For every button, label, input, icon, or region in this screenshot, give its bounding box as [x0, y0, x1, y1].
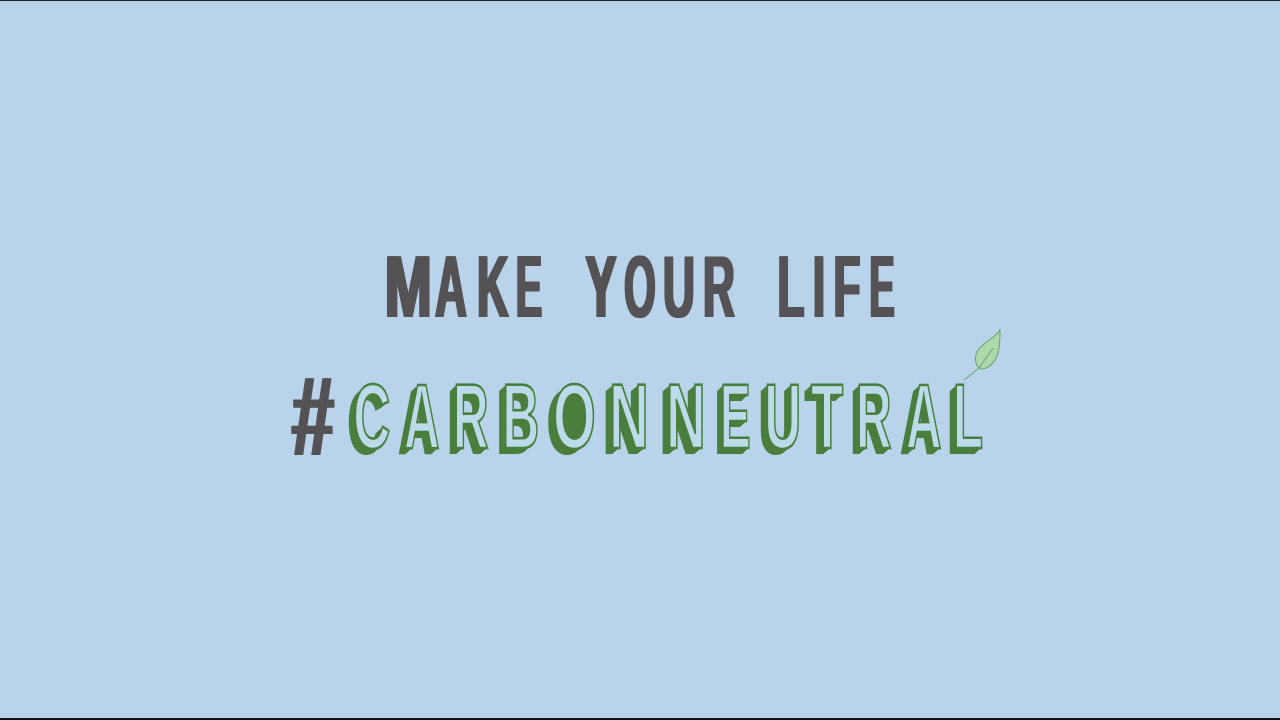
hashtag word: carbonneutral: R: [453, 366, 489, 468]
hashtag word: carbonneutral: L: [953, 366, 983, 468]
hashtag word: carbonneutral: N: [666, 366, 706, 468]
hashtag word: carbonneutral: T: [811, 366, 843, 468]
hashtag word: carbonneutral: B: [502, 366, 539, 468]
heading: make your life: O: [624, 236, 655, 336]
hashtag word: carbonneutral: C: [353, 366, 390, 468]
hashtag word: carbonneutral: N: [609, 366, 649, 468]
heading: make your life: M: [385, 236, 432, 336]
heading: make your life: F: [833, 236, 860, 336]
hashtag word: carbonneutral: A: [404, 366, 440, 468]
hashtag word: carbonneutral: E: [720, 366, 751, 468]
heading: make your life: K: [476, 236, 508, 336]
heading: make your life: R: [703, 236, 735, 336]
hashtag word: carbonneutral: U: [764, 366, 801, 468]
heading: make your life: I: [812, 236, 825, 336]
heading: make your life: L: [777, 236, 804, 336]
hashtag word: carbonneutral: A: [906, 366, 942, 468]
heading: make your life: Y: [585, 236, 617, 336]
hashtag word: carbonneutral: R: [856, 366, 892, 468]
hashtag symbol: #: [291, 354, 333, 479]
heading: make your life: E: [516, 236, 542, 336]
hashtag word: carbonneutral: O: [553, 366, 596, 468]
top edge line: [0, 0, 1280, 1]
heading: make your life: U: [663, 236, 695, 336]
heading: make your life: E: [869, 236, 894, 336]
bottom edge line: [0, 718, 1280, 720]
heading: make your life: A: [435, 236, 467, 336]
